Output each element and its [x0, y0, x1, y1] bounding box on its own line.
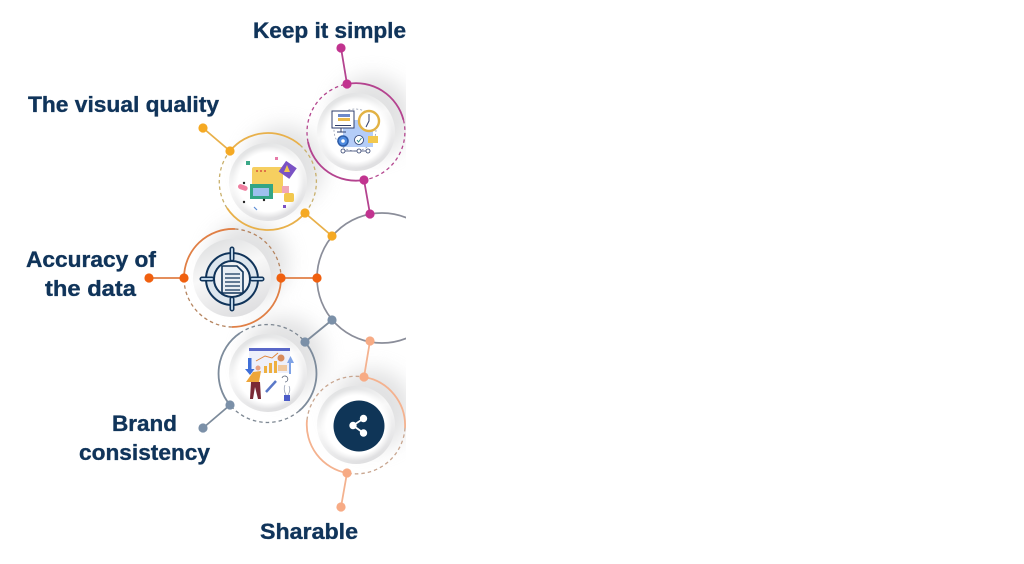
heading: accuracy of the data	[26, 247, 157, 301]
heading: accuracy of the data: Accuracy of	[26, 247, 157, 272]
ring: sharable	[307, 336, 405, 512]
heading: brand consistency: Brand	[112, 411, 177, 436]
heading: brand consistency: consistency	[79, 440, 211, 465]
icon: analyst with charts	[245, 348, 294, 401]
heading: brand consistency	[79, 411, 211, 465]
ring: keep it simple	[307, 43, 405, 219]
icon: share button	[334, 400, 384, 452]
diagram	[144, 43, 406, 512]
icon: monitor, clock and gear	[332, 109, 379, 153]
infographic canvas	[26, 22, 406, 540]
heading: sharable: Sharable	[260, 519, 358, 544]
central large ring	[316, 212, 406, 344]
icon: design folder and cards	[237, 157, 297, 210]
heading: accuracy of the data: the data	[45, 276, 137, 301]
ring: brand consistency	[198, 315, 337, 433]
heading: the visual quality: The visual quality	[28, 92, 220, 117]
ring: the visual quality	[198, 123, 337, 241]
icon: document target	[202, 249, 262, 309]
ring: accuracy of the data	[144, 229, 322, 327]
heading: keep it simple: Keep it simple	[253, 18, 406, 43]
soft disc shadows	[208, 76, 412, 449]
